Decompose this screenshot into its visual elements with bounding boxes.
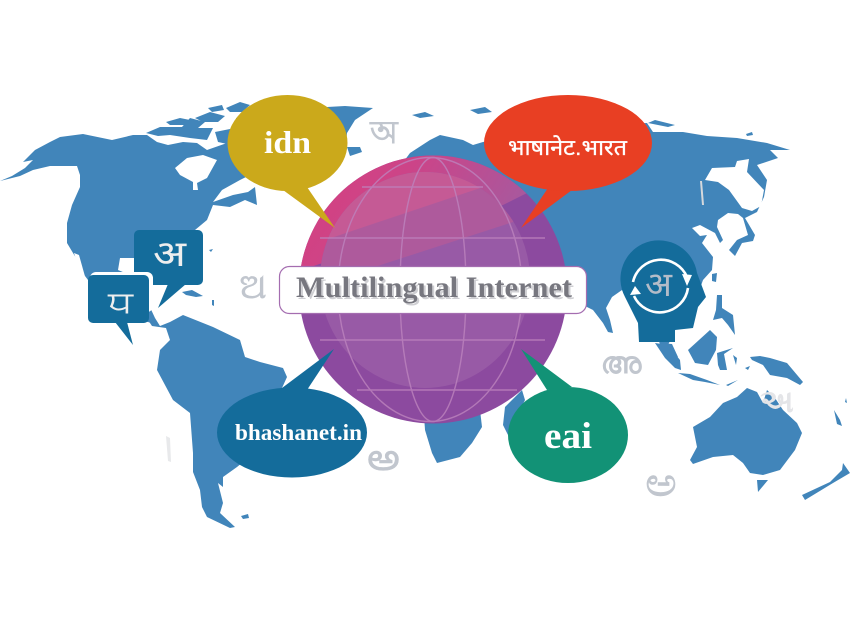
grey slivers [166,181,704,462]
script glyph: Kannada: ಅ [645,461,677,505]
Java [678,373,738,386]
bubble: eai: eai [544,416,592,457]
globe grid [320,158,545,422]
Australia [690,388,802,475]
bubble: idn: idn [264,124,311,160]
Taiwan [712,273,717,282]
Canadian Arctic islands [146,102,262,145]
script glyph: Telugu: అ [367,437,400,479]
Sumatra and Malay peninsula [655,343,681,370]
Borneo [688,330,717,365]
North America [0,125,300,326]
icon: head with translation cycle: अ [645,266,673,304]
globe [301,156,565,424]
inland waters [74,155,764,280]
Svalbard and Arctic isles [412,107,753,136]
Madagascar [503,390,525,435]
chat bubble: Gurmukhi: ਧ [107,286,134,319]
bubble: bhashanet.in: bhashanet.in [235,420,362,445]
Cuba and Caribbean [182,249,214,306]
sliver right [700,181,704,205]
Sulawesi [717,348,733,370]
Hudson Bay [175,155,217,190]
chat icon [88,230,203,345]
Africa [423,400,482,463]
Tasmania [757,480,768,492]
Falkland Islands [241,514,249,519]
script glyph: Malayalam: അ [601,347,642,380]
arrowheads [630,274,692,295]
globe inner sphere [321,172,529,388]
title label [280,266,586,314]
cycle arrows [633,260,688,312]
bubble: bhashanet.in [217,349,367,478]
icon: head with translation cycle [620,240,706,342]
New Guinea [733,355,803,385]
world map [0,100,850,528]
sliver left [166,436,171,462]
globe pink band [301,156,526,266]
bubble: eai [508,349,628,483]
script glyph: Bengali: অ [369,114,399,150]
Eurasia [396,123,790,345]
script glyph: Odia: ଅ [240,268,266,306]
title label: Multilingual Internet [296,271,572,304]
chat bubble: Devanagari: अ [153,233,188,274]
bubble: idn [228,95,348,228]
script glyph: Gujarati: અ [760,383,794,419]
South America [148,315,290,528]
Gulf of California [74,253,86,280]
Greenland [240,100,373,175]
Philippines [713,295,735,335]
bubble: bhashanet Devanagari [484,95,652,228]
Sea of Okhotsk [705,159,764,211]
bubble: bhashanet Devanagari: भाषानेट.भारत [508,135,627,160]
New Zealand [802,463,850,500]
Pacific islands [834,398,847,426]
